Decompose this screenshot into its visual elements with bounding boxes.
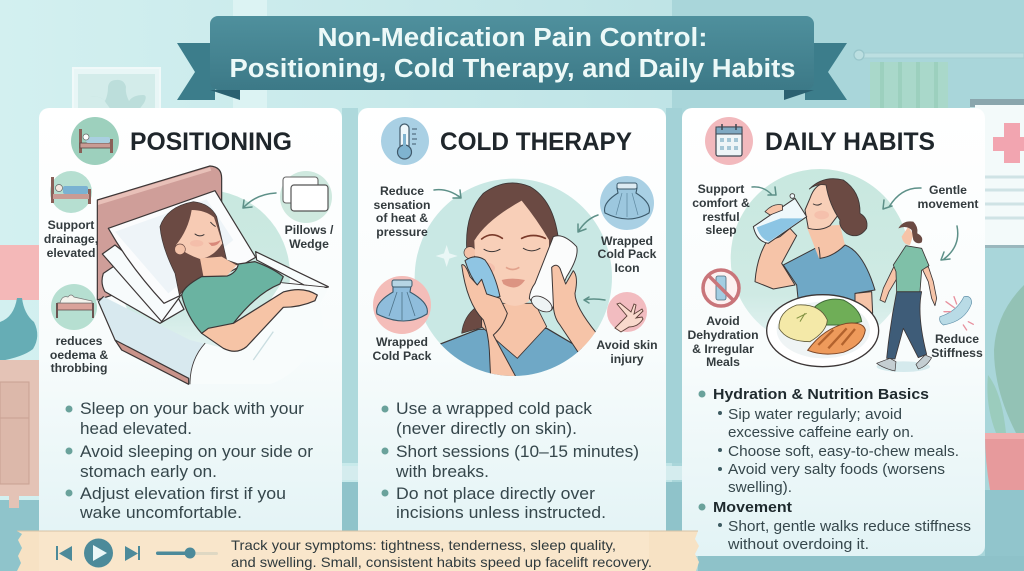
bullet list: cold therapy tips: Do not place directly over <box>396 485 596 503</box>
title text <box>230 24 796 83</box>
label: reduce sensation: pressure <box>376 225 428 239</box>
bullet list: habits tips: swelling). <box>728 480 792 496</box>
bullet list: habits tips <box>698 386 971 553</box>
label: reduce sensation: of heat & <box>376 211 428 225</box>
label: support drainage: elevated <box>47 246 95 260</box>
bullet list: habits tips: Short, gentle walks reduce stiffness <box>728 519 971 535</box>
label: reduces oedema: throbbing <box>51 361 107 375</box>
icon: bed badge <box>71 117 119 165</box>
title text: Positioning, Cold Therapy, and Daily Habits <box>230 55 796 83</box>
panel: positioning <box>39 108 342 548</box>
label: reduces oedema: oedema & <box>50 348 108 362</box>
label: wrapped cold pack: Cold Pack <box>373 349 432 363</box>
footer text <box>231 537 652 570</box>
title text: Non-Medication Pain Control: <box>318 24 708 52</box>
icon: hand skin injury <box>607 292 647 332</box>
illustration: drinking woman, meal plate and walker <box>731 169 973 372</box>
bullet list: cold therapy tips: Use a wrapped cold pack <box>396 400 593 418</box>
title banner <box>177 16 847 100</box>
icon: pillows <box>280 171 332 223</box>
bullet list: positioning tips: Avoid sleeping on your side or <box>80 443 314 461</box>
bullet list: cold therapy tips: incisions unless instructed. <box>396 504 606 522</box>
bullet list: cold therapy tips <box>382 400 639 522</box>
arrow: support comfort <box>752 187 776 195</box>
arrow: pillows to bed <box>243 193 276 208</box>
label: pillows: Wedge <box>289 237 329 251</box>
arrow: to reduce stiffness <box>941 226 958 260</box>
label: support comfort: restful <box>702 210 740 224</box>
label: avoid dehydration: & Irregular <box>692 342 754 356</box>
heading: COLD THERAPY <box>440 128 632 156</box>
label: reduces oedema: reduces <box>56 334 102 348</box>
bullet list: cold therapy tips: with breaks. <box>395 463 489 481</box>
bullet list: positioning tips: Sleep on your back with your <box>80 400 305 418</box>
label: gentle movement: Gentle <box>929 183 967 197</box>
bullet list: positioning tips: head elevated. <box>80 420 192 438</box>
label: avoid dehydration: Dehydration <box>687 328 759 342</box>
footer text: Track your symptoms: tightness, tenderness, sleep quality, <box>231 537 616 553</box>
bedside lamp and nightstand <box>0 245 39 508</box>
label: reduce stiffness: Reduce <box>935 332 979 346</box>
heading: DAILY HABITS <box>765 128 935 156</box>
icon: calendar badge <box>705 117 753 165</box>
icon: wrapped cold pack <box>600 176 654 230</box>
footer tape bar <box>17 531 699 571</box>
label: support comfort: Support <box>698 182 744 196</box>
audio controls <box>56 538 218 568</box>
bullet list: habits tips: Avoid very salty foods (worsens <box>728 462 945 478</box>
icon: elevated bed badge <box>50 171 92 213</box>
bullet list: cold therapy tips: (never directly on skin). <box>396 420 577 438</box>
bullet list: habits tips: Choose soft, easy-to-chew meals. <box>728 444 959 460</box>
bullet list: habits tips: excessive caffeine early on. <box>728 425 914 441</box>
label: support drainage: drainage, <box>44 232 98 246</box>
label: reduce sensation: sensation <box>374 198 430 212</box>
label: support drainage: Support <box>48 218 94 232</box>
arrow: cold pack icon <box>578 215 598 232</box>
label: support comfort: comfort & <box>692 196 750 210</box>
bullet list: habits tips: Hydration & Nutrition Basics <box>713 386 929 403</box>
label: avoid dehydration: Meals <box>706 355 740 369</box>
label: gentle movement: movement <box>918 197 978 211</box>
label: avoid dehydration: Avoid <box>706 314 740 328</box>
illustration: woman sleeping in elevated bed <box>97 166 328 384</box>
label: wrapped cold pack icon: Cold Pack <box>598 247 657 261</box>
bullet list: positioning tips <box>66 400 314 522</box>
bullet list: positioning tips: Adjust elevation first if you <box>80 485 286 503</box>
curtain and rod <box>854 50 1024 112</box>
bullet list: cold therapy tips: Short sessions (10–15 minutes) <box>396 443 639 461</box>
bullet list: habits tips: Sip water regularly; avoid <box>728 407 902 423</box>
icon: thermometer badge <box>381 117 429 165</box>
label: reduce sensation: Reduce <box>380 184 424 198</box>
wall picture frame <box>73 68 160 114</box>
arrow: reduce sensation <box>434 190 461 198</box>
label: reduce stiffness: Stiffness <box>931 346 983 360</box>
icon: cold pack <box>373 276 431 334</box>
potted plant <box>985 285 1024 490</box>
arrow: avoid skin injury <box>584 297 605 303</box>
label: wrapped cold pack icon: Wrapped <box>601 234 653 248</box>
icon: flat bed badge <box>51 284 97 330</box>
bullet list: positioning tips: stomach early on. <box>80 463 217 481</box>
icon: no dehydration <box>703 270 739 306</box>
wall medical chart with red cross <box>970 99 1024 248</box>
footer text: and swelling. Small, consistent habits speed up facelift recovery. <box>231 554 652 570</box>
label: avoid skin injury: Avoid skin <box>596 338 658 352</box>
label: avoid skin injury: injury <box>610 352 644 366</box>
heading: POSITIONING <box>130 128 292 156</box>
label: support comfort: sleep <box>705 223 737 237</box>
label: wrapped cold pack icon: Icon <box>614 261 640 275</box>
panel: daily habits <box>682 108 985 556</box>
arrow: gentle movement <box>883 188 921 209</box>
panel: cold therapy <box>358 108 666 548</box>
bullet list: positioning tips: wake uncomfortable. <box>79 504 242 522</box>
label: pillows: Pillows / <box>285 223 333 237</box>
label: wrapped cold pack: Wrapped <box>376 335 428 349</box>
bullet list: habits tips: Movement <box>713 499 792 516</box>
illustration: woman applying cold pack <box>414 178 612 376</box>
bullet list: habits tips: without overdoing it. <box>727 537 869 553</box>
